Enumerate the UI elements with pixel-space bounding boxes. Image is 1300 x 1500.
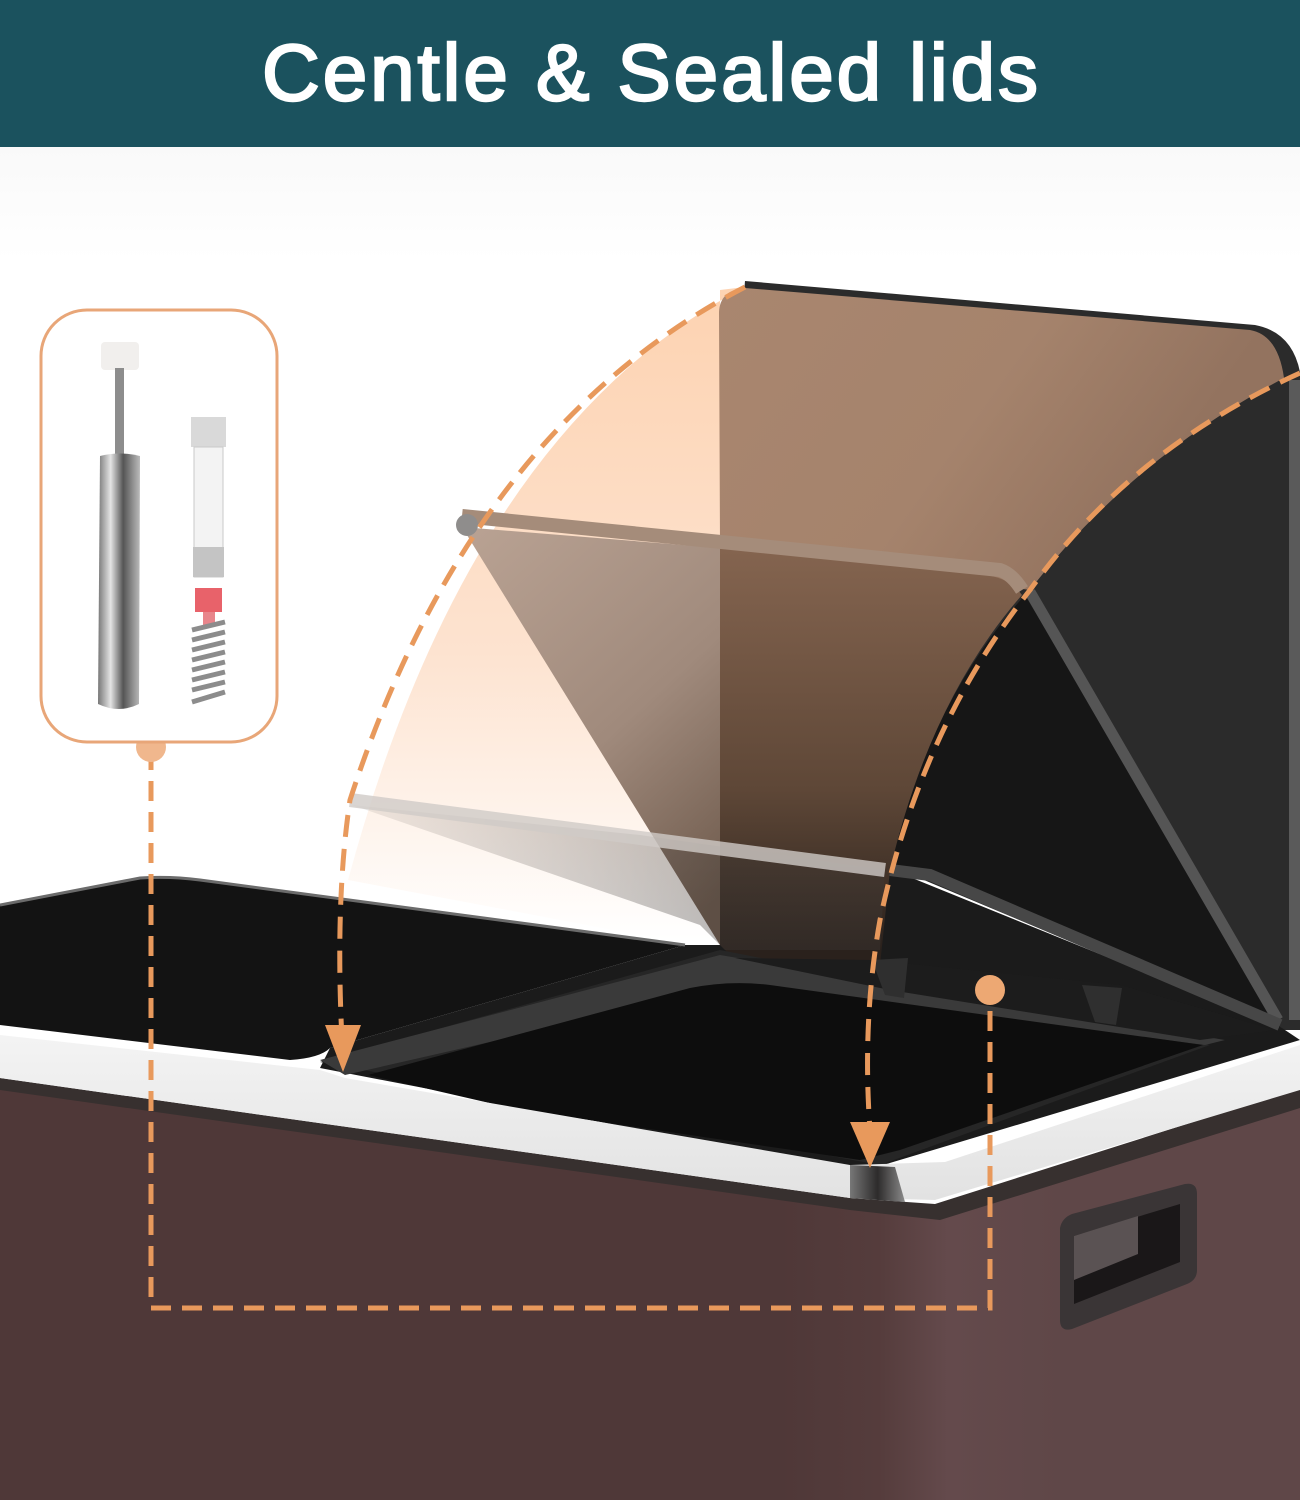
arrowhead xyxy=(850,1122,890,1168)
lowest translucent lid xyxy=(350,800,885,950)
dark trim under rim xyxy=(0,1078,1300,1220)
connector dot: hinge xyxy=(975,975,1005,1005)
cabinet front xyxy=(0,1085,1300,1500)
connector dot: callout xyxy=(136,732,166,762)
arrow path: rear lid sweep xyxy=(850,373,1300,1168)
hinge tabs xyxy=(872,958,1122,1025)
middle lid right half xyxy=(720,548,1022,965)
bin well backing xyxy=(320,865,1300,1172)
stainless rim xyxy=(0,1035,1300,1200)
opening sweep fan xyxy=(348,287,745,950)
arrowhead xyxy=(325,1025,361,1072)
middle translucent lid xyxy=(456,514,1022,965)
open lid: rear black panel xyxy=(720,281,1300,1030)
dashed connector to spring pin xyxy=(136,732,1005,1308)
title: Centle & Sealed lids xyxy=(262,28,1038,117)
side handle xyxy=(1060,1184,1197,1330)
hinge knob xyxy=(456,514,478,536)
bin opening xyxy=(320,950,1275,1165)
lower lid edge xyxy=(890,870,1280,1025)
closed lid on left xyxy=(0,877,685,1060)
icon: cutaway pin xyxy=(191,417,226,702)
middle lid edge xyxy=(462,516,1022,590)
icon: assembled pin xyxy=(98,342,140,709)
open lid: lower black fold xyxy=(890,595,1282,1030)
rim corner xyxy=(850,1165,905,1202)
inner bucket xyxy=(368,983,1203,1160)
lid hinge strip xyxy=(735,958,1275,1040)
header banner xyxy=(0,0,1300,147)
rear panel side edge xyxy=(1289,380,1300,1020)
fold edge highlight xyxy=(1030,592,1278,1020)
callout: spring pin detail xyxy=(41,310,277,742)
arrow path: upper lid sweep xyxy=(325,287,745,1072)
open lid: translucent brown upper area xyxy=(719,288,1284,590)
